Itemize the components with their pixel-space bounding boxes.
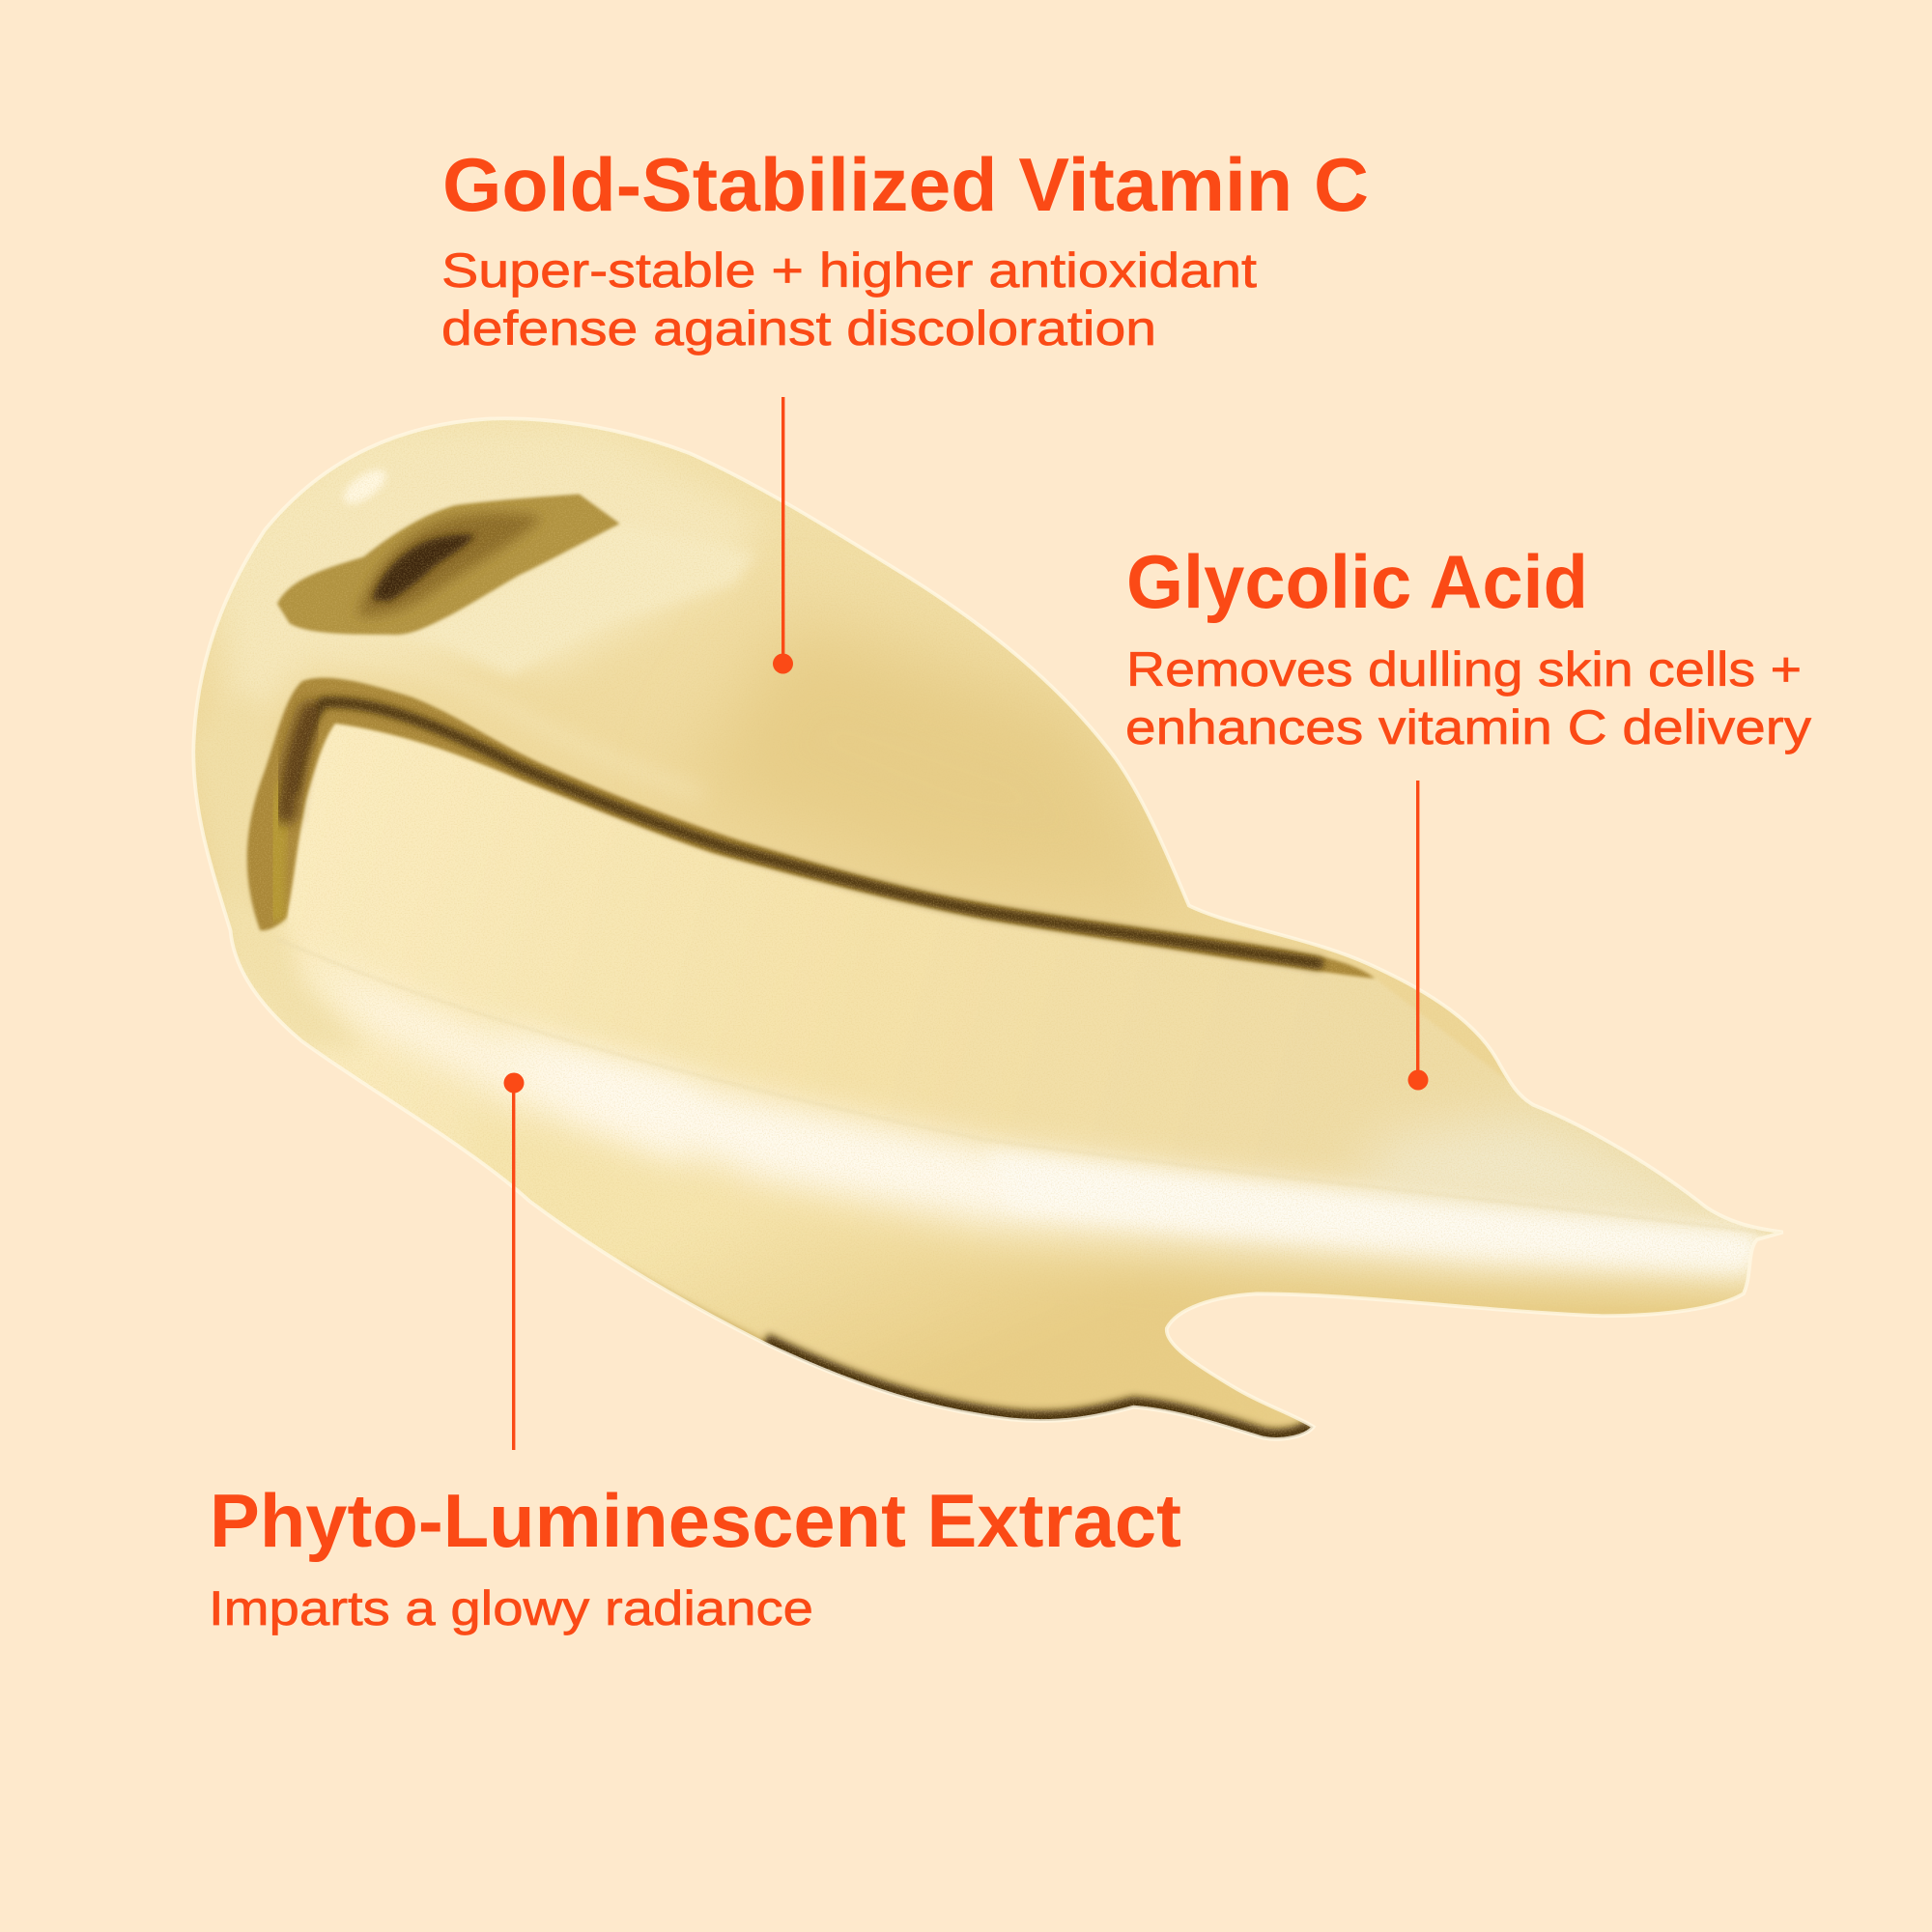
pointer: glycolic acid [1408, 781, 1428, 1090]
groove [247, 678, 1375, 979]
lower left edge tone [224, 902, 354, 1047]
ridge above groove [492, 701, 694, 794]
glossy rim [193, 418, 1783, 1439]
pointer: vitamin C [773, 397, 793, 674]
pointer: phyto-luminescent extract [504, 1072, 524, 1450]
description: Super-stable + higher antioxidant [441, 243, 1257, 298]
left pale glow [296, 955, 690, 1164]
heading: Gold-Stabilized Vitamin C [442, 142, 1369, 227]
description: defense against discoloration [441, 301, 1156, 355]
description [1125, 642, 1811, 754]
upper lobe tone [191, 425, 1182, 936]
description: enhances vitamin C delivery [1125, 700, 1811, 754]
crease line [277, 939, 1762, 1233]
callout: Phyto-Luminescent Extract [209, 1478, 1181, 1635]
description: Removes dulling skin cells + [1126, 642, 1802, 696]
description: Imparts a glowy radiance [209, 1581, 813, 1635]
infographic canvas [191, 156, 1812, 1635]
white band [493, 1033, 1762, 1274]
sparkle grain [173, 394, 1799, 1454]
heading: Phyto-Luminescent Extract [210, 1478, 1181, 1563]
bottom dark edge [616, 1269, 1314, 1439]
fade above crease [1356, 1100, 1713, 1215]
lower lobe tone [265, 724, 1774, 1296]
dark smudge [277, 494, 620, 635]
description [441, 243, 1257, 355]
bottom yellow tone [491, 1146, 1743, 1426]
callout: Glycolic Acid [1125, 539, 1811, 754]
heading: Glycolic Acid [1126, 539, 1588, 624]
callout: Gold-Stabilized Vitamin C [441, 142, 1369, 355]
cream swatch [173, 394, 1799, 1454]
